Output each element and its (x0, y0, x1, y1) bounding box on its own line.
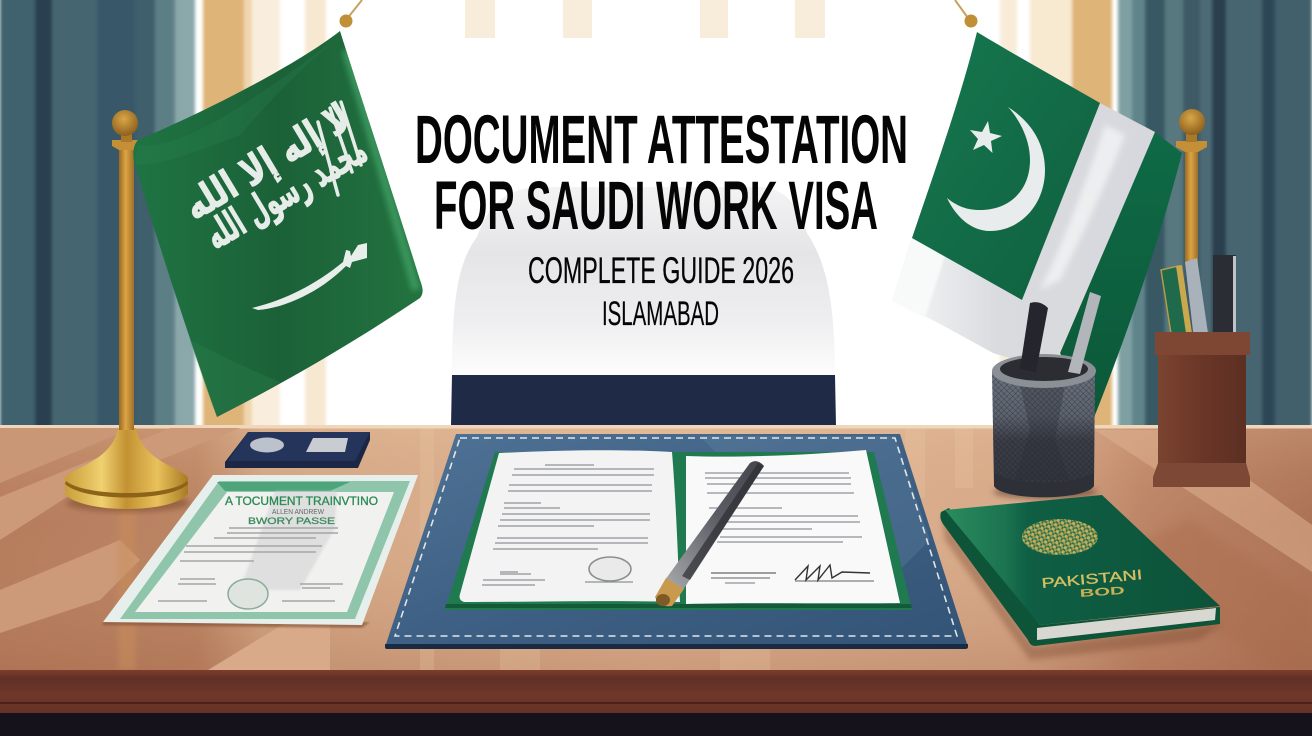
open document folder (445, 450, 912, 610)
right green band (1060, 132, 1182, 420)
certificate heading: A TOCUMENT TRAINVTINO (225, 494, 378, 508)
curtain: left tan (203, 0, 326, 428)
document seal (589, 557, 631, 581)
icon: shahada calligraphy (176, 95, 375, 259)
desk top (0, 425, 1312, 690)
title line 2: FOR SAUDI WORK VISA (434, 167, 878, 244)
fountain pen (655, 461, 764, 606)
curtain: right teal (1118, 0, 1312, 428)
certificate seal (228, 579, 268, 609)
mesh pen cup with pens (992, 292, 1101, 499)
passport emblem (1022, 519, 1098, 555)
title (415, 101, 908, 333)
location: ISLAMABAD (602, 295, 719, 333)
wood pen holder (1153, 255, 1250, 487)
icon: shahada calligraphy: لا إله إلا الله (176, 95, 359, 230)
window background (0, 0, 1312, 430)
signature (795, 565, 870, 580)
passport (940, 495, 1222, 660)
desk front edge (0, 670, 1312, 736)
certificate heading (225, 494, 378, 526)
chair (451, 187, 836, 426)
passport label: PAKISTANI (1041, 566, 1143, 591)
icon: shahada calligraphy: محمد رسول الله (197, 127, 375, 259)
saudi flag stand (65, 110, 190, 512)
passport label (1041, 566, 1143, 600)
white stripe (892, 103, 1155, 365)
black pen (1020, 302, 1048, 372)
dark id card (225, 432, 370, 468)
curtain: left teal (0, 0, 195, 428)
icon: sword (252, 243, 367, 310)
green hoist (912, 32, 1100, 300)
left page (460, 450, 680, 602)
subtitle: COMPLETE GUIDE 2026 (528, 250, 794, 291)
certificate (103, 475, 418, 628)
icon: crescent (947, 107, 1045, 231)
certificate heading: ALLEN ANDREW (272, 509, 324, 516)
text lines (482, 465, 874, 585)
desk mat (385, 434, 968, 649)
saudi flag (133, 0, 423, 417)
silver pen (1068, 292, 1101, 374)
pakistan flag (892, 0, 1182, 420)
certificate heading: BWORY PASSE (248, 516, 335, 526)
right page (686, 450, 900, 604)
curtain: right tan (1000, 0, 1112, 428)
title line 1: DOCUMENT ATTESTATION (415, 101, 908, 178)
passport label: BOD (1079, 585, 1125, 600)
pakistan flag stand (1176, 109, 1207, 265)
icon: star (970, 121, 1002, 153)
